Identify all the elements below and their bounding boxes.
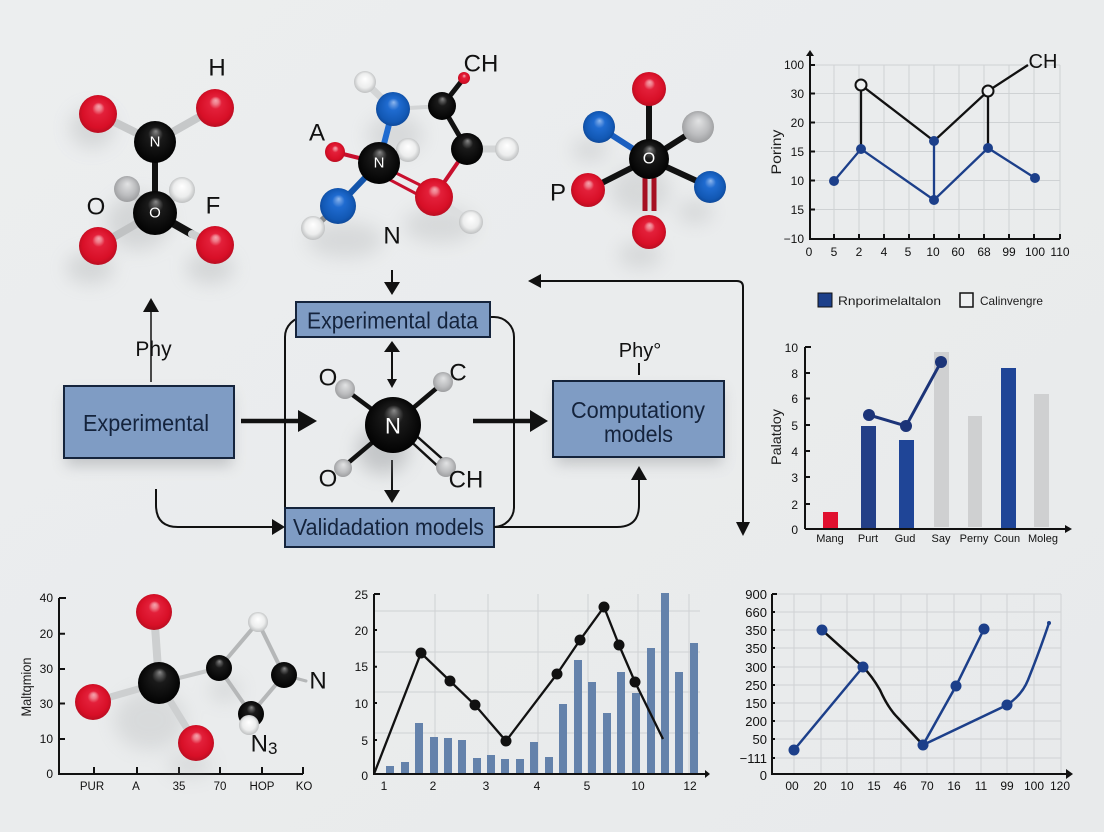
box: Computational models: models [604, 421, 673, 447]
chart: bottom left molecule axes: 35 [173, 781, 185, 793]
chart: bottom centre bars and line: 3 [483, 779, 490, 793]
box: Experimental: Experimental [83, 410, 209, 436]
molecule: top left: O [87, 194, 105, 220]
chart: bottom centre bars and line: 10 [631, 779, 645, 793]
chart: top right line chart: 0 [806, 245, 813, 259]
molecule: top left: O [149, 204, 161, 222]
box: Computational models: Computationy [571, 397, 705, 423]
molecule: centre: O [319, 466, 337, 492]
chart: bottom left molecule axes: A [132, 781, 140, 793]
chart: top right line chart: 5 [905, 245, 912, 259]
chart: bottom right line chart: 300 [745, 660, 767, 675]
chart: bottom centre bars and line: 20 [355, 624, 368, 638]
chart: bottom right line chart: 350 [745, 641, 767, 656]
chart: bottom centre bars and line: 25 [355, 588, 368, 602]
chart: top right line chart [768, 50, 1070, 259]
chart: bottom left molecule axes: 40 [40, 591, 53, 605]
chart: bottom centre bars and line: 5 [361, 734, 368, 748]
molecule: top right: O [643, 150, 655, 168]
chart: bottom right line chart: 46 [893, 779, 907, 793]
chart: right bar chart: Perny [960, 533, 989, 545]
legend [818, 293, 1043, 308]
chart: top right line chart: 100 [1025, 245, 1045, 259]
box: Experimental data: Experimental data [307, 308, 478, 334]
chart: bottom right line chart: 350 [745, 623, 767, 638]
molecule: top centre [301, 50, 519, 258]
chart: bottom right line chart: 70 [920, 779, 934, 793]
molecule: centre: CH [449, 466, 483, 494]
chart: bottom right line chart: 20 [813, 779, 827, 793]
chart: top right line chart: 110 [1050, 245, 1070, 259]
chart: top right line chart: 15 [791, 145, 804, 159]
chart: bottom left molecule axes: 70 [214, 781, 226, 793]
chart: right bar chart: Moleg [1028, 533, 1058, 545]
box: Validation models [285, 508, 494, 547]
chart: bottom left molecule axes: 30 [40, 662, 53, 676]
chart: bottom centre bars and line: 5 [584, 779, 591, 793]
chart: right bar chart: Mang [816, 533, 844, 545]
chart: bottom right line chart: 900 [745, 587, 767, 602]
arrow: molecule to Computational [473, 410, 548, 432]
molecule: top centre: A [309, 120, 325, 146]
chart: bottom centre bars and line: 10 [355, 697, 368, 711]
chart: bottom right line chart: 120 [1050, 779, 1070, 793]
chart: top right line chart: 10 [791, 174, 804, 188]
chart: bottom right line chart: 200 [745, 714, 767, 729]
chart: bottom right line chart [740, 587, 1073, 793]
chart: bottom centre bars and line: 12 [683, 779, 697, 793]
chart: bottom centre bars and line: 4 [534, 779, 541, 793]
box: Computational models [553, 381, 724, 457]
chart: bottom right line chart: 99 [1000, 779, 1014, 793]
box: Experimental data [296, 302, 490, 337]
molecule: centre: O [319, 364, 337, 392]
chart: top right line chart: 10 [926, 245, 940, 259]
chart: right bar chart: 6 [791, 392, 798, 406]
chart: bottom right line chart: 0 [760, 768, 767, 783]
chart: bottom left molecule axes: 30 [40, 697, 53, 711]
chart: bottom centre bars and line: 15 [355, 660, 368, 674]
molecule: top left: F [206, 192, 220, 220]
molecule: top left [66, 54, 234, 284]
chart: top right line chart: Poriny [768, 129, 784, 175]
legend: Rnporimelaltalon [838, 294, 941, 308]
arrow: down to Validation [384, 460, 400, 503]
chart: right bar chart: Palatdoy [768, 409, 784, 465]
chart: bottom centre bars and line: 0 [361, 769, 368, 783]
chart: bottom left molecule axes: 10 [40, 732, 53, 746]
chart: bottom left molecule axes [18, 591, 327, 793]
chart: bottom left molecule axes: N [309, 668, 327, 694]
chart: top right line chart: 4 [881, 245, 888, 259]
legend: Calinvengre [980, 294, 1043, 308]
chart: bottom right line chart: 10 [840, 779, 854, 793]
arrow: Experimental curve to Validation [156, 489, 285, 535]
chart: bottom left molecule axes: Maltqmion [18, 658, 34, 716]
chart: bottom right line chart: 100 [1024, 779, 1044, 793]
molecule: top right: P [550, 180, 566, 206]
chart: right bar chart: 4 [791, 445, 798, 459]
arrow: Validation curve to Computational [494, 466, 647, 527]
chart: bottom right line chart: 11 [975, 779, 988, 793]
chart: bottom left molecule axes: PUR [80, 781, 104, 793]
chart: bottom left molecule axes: 20 [40, 627, 53, 641]
chart: bottom right line chart: 50 [753, 732, 767, 747]
chart: top right line chart: 99 [1002, 245, 1016, 259]
chart: bottom right line chart: −111 [740, 751, 767, 766]
chart: right bar chart: 8 [791, 367, 798, 381]
chart: right bar chart: 5 [791, 419, 798, 433]
molecule: top left: N [150, 134, 160, 150]
label: Phy left: Phy [135, 338, 172, 361]
chart: top right line chart: 68 [977, 245, 991, 259]
chart: right bar chart: 2 [791, 498, 798, 512]
chart: bottom centre bars and line: 2 [430, 779, 437, 793]
panel: workflow diagram [64, 270, 750, 547]
chart: top right line chart: −10 [784, 232, 804, 246]
molecule: top centre: CH [464, 50, 498, 78]
box shadows [66, 390, 722, 466]
chart: right bar chart: Purt [858, 533, 878, 545]
chart: right bar chart: 0 [791, 523, 798, 537]
chart: top right line chart: 30 [791, 87, 804, 101]
chart: bottom right line chart: 15 [867, 779, 881, 793]
box: Experimental [64, 386, 234, 458]
molecule: top left: H [208, 54, 226, 82]
chart: bottom right line chart: 150 [745, 696, 767, 711]
molecule: top centre: N [374, 154, 384, 172]
arrow: Experimental to molecule [241, 410, 317, 432]
label: Phy right [619, 340, 661, 375]
chart: bottom left molecule axes: 3 [268, 738, 277, 758]
chart: bottom centre bars and line: 1 [381, 779, 388, 793]
arrow: double vertical [384, 341, 400, 388]
label: Phy right: Phy° [619, 340, 661, 362]
chart: top right line chart: CH [1029, 51, 1057, 73]
box: Validation models: Validadation models [293, 514, 484, 540]
chart: bottom left molecule axes: HOP [250, 781, 275, 793]
molecule: top right [550, 72, 726, 269]
chart: right bar chart: Gud [895, 533, 915, 545]
chart: top right line chart: 100 [784, 58, 804, 72]
chart: right bar chart [768, 341, 1072, 545]
chart: top right line chart: 2 [856, 245, 863, 259]
chart: right bar chart: Say [932, 533, 951, 545]
chart: bottom right line chart: 00 [785, 779, 799, 793]
chart: right bar chart: Coun [994, 533, 1020, 545]
chart: top right line chart: 15 [791, 203, 804, 217]
chart: bottom left molecule axes: KO [296, 781, 312, 793]
molecule: centre: N [385, 414, 401, 438]
chart: right bar chart: 3 [791, 471, 798, 485]
arrow: up from Experimental [143, 298, 159, 382]
chart: right bar chart: 10 [785, 341, 798, 355]
chart: top right line chart: 5 [831, 245, 838, 259]
molecule: centre: C [449, 360, 467, 386]
chart: bottom right line chart: 250 [745, 678, 767, 693]
chart: bottom centre bars and line [355, 588, 710, 793]
chart: top right line chart: 20 [791, 116, 804, 130]
arrow: right feedback loop [528, 274, 750, 536]
validation loop outline [285, 317, 514, 527]
arrow: N down to Experimental data [384, 270, 400, 295]
chart: bottom right line chart: 660 [745, 605, 767, 620]
chart: bottom left molecule axes: 0 [46, 767, 53, 781]
molecule: centre [319, 360, 483, 494]
chart: bottom left molecule axes: N [251, 730, 268, 758]
chart: top right line chart: 60 [951, 245, 965, 259]
molecule: top centre: N [383, 222, 401, 250]
chart: bottom right line chart: 16 [947, 779, 961, 793]
